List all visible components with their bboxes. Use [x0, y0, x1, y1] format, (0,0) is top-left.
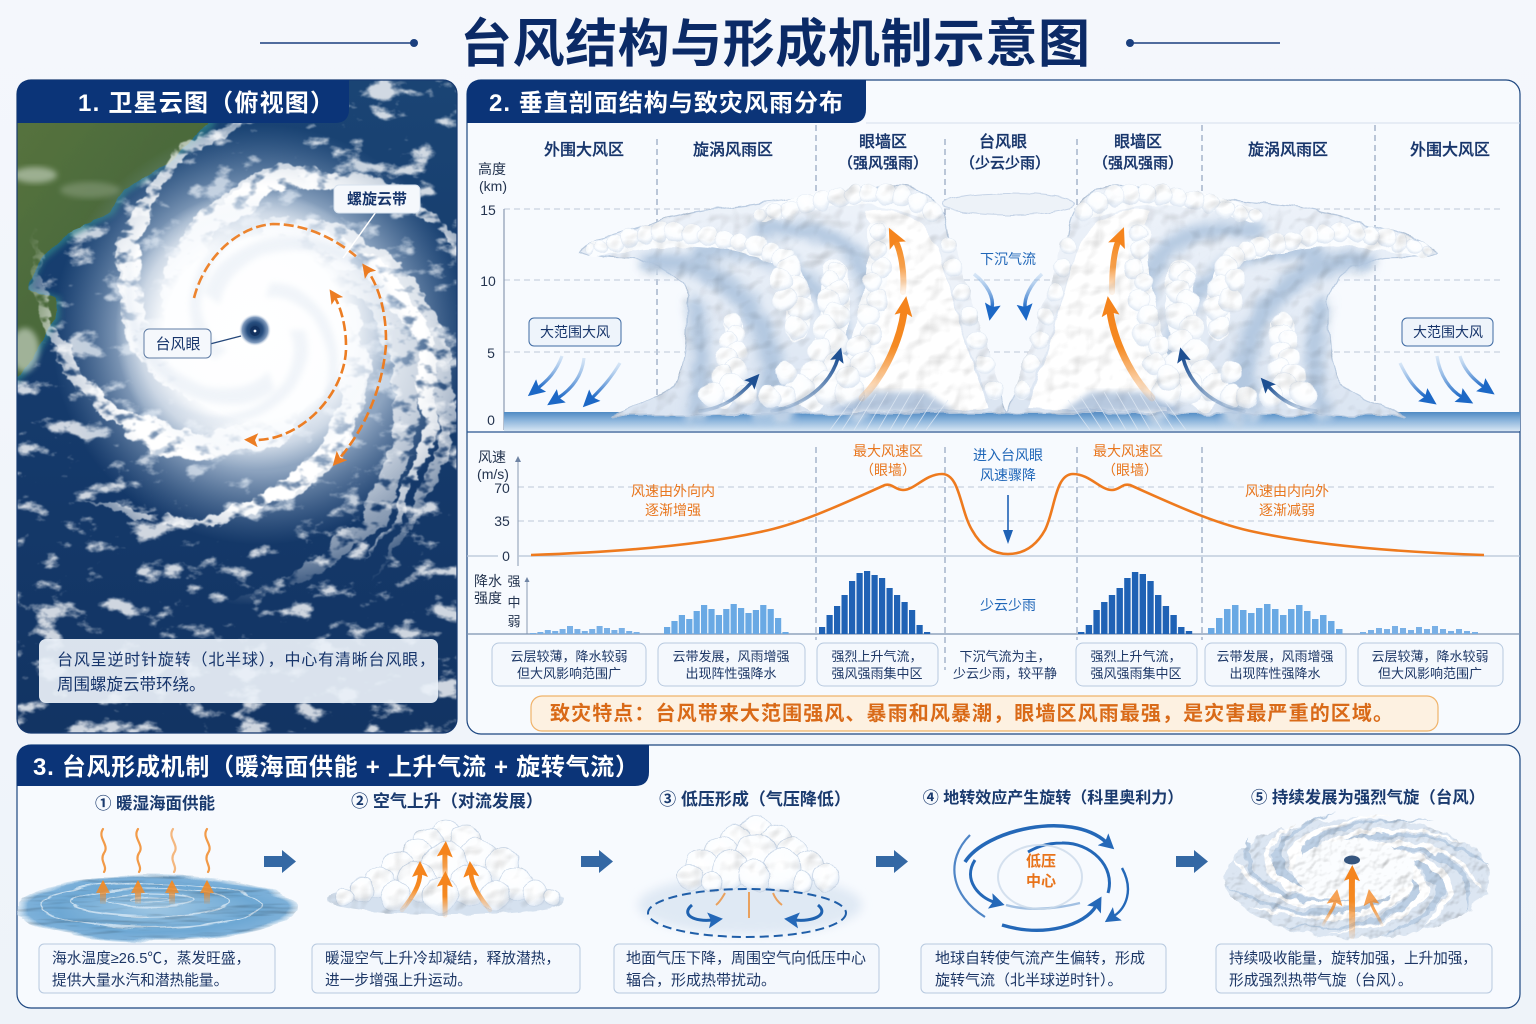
step 5 caption: 持续吸收能量，旋转加强，上升加强， — [1229, 950, 1477, 967]
zone caption boxes: 强风强雨集中区 — [831, 666, 923, 681]
eyewall clouds, left and right — [579, 184, 1437, 416]
cloud — [677, 816, 839, 892]
central ascent arrows — [1323, 878, 1382, 936]
zone caption boxes: 云带发展，风雨增强 — [672, 649, 790, 664]
step 4: Coriolis: ④ 地转效应产生旋转（科里奥利力） — [923, 788, 1183, 807]
hazy surface — [638, 875, 862, 935]
panel: satellite view — [16, 79, 458, 734]
height axis: 10 — [480, 273, 496, 289]
wind arrows right — [1400, 356, 1484, 397]
typhoon disk — [1213, 804, 1503, 944]
low-pressure ring — [648, 889, 846, 937]
wind annotations: （眼墙） — [860, 462, 916, 478]
header: panel 1: 1. 卫星云图（俯视图） — [78, 90, 334, 117]
zone labels: 旋涡风雨区 — [1248, 141, 1328, 159]
panel: formation mechanism — [16, 745, 1520, 1008]
zone caption boxes: 云层较薄，降水较弱 — [1371, 649, 1489, 664]
rotating flow arrows — [954, 826, 1128, 930]
header: panel 1 — [17, 80, 349, 123]
zone labels: 外围大风区 — [1410, 141, 1490, 159]
satellite caption: 台风呈逆时针旋转（北半球），中心有清晰台风眼， — [57, 651, 435, 669]
zone labels — [544, 132, 1490, 172]
header: panel 3: 3. 台风形成机制（暖海面供能 + 上升气流 + 旋转气流） — [33, 753, 639, 781]
zone caption boxes: 出现阵性强降水 — [1229, 666, 1321, 681]
step 1 caption: 提供大量水汽和潜热能量。 — [52, 972, 228, 989]
step 4 caption: 地球自转使气流产生偏转，形成 — [935, 950, 1145, 967]
wind speed curve — [531, 474, 1484, 555]
low-pressure centre label — [1026, 852, 1056, 890]
eyewall rainfall bars — [819, 571, 1192, 634]
disaster banner: 致灾特点：台风带来大范围强风、暴雨和风暴潮，眼墙区风雨最强，是灾害最严重的区域。 — [550, 701, 1393, 725]
wind annotations: 风速骤降 — [980, 467, 1036, 483]
wind speed chart: 70 — [494, 480, 510, 496]
label: spiral band — [334, 185, 420, 258]
label: typhoon eye — [144, 329, 241, 358]
zone caption boxes: 云层较薄，降水较弱 — [510, 649, 628, 664]
arrow: step 4 to 5 — [1176, 850, 1208, 873]
chart zone separators — [816, 447, 1202, 670]
panel outline — [17, 80, 457, 733]
step 2 caption: 暖湿空气上升冷却凝结，释放潜热， — [325, 950, 560, 967]
updraft arrows — [402, 854, 490, 915]
step 5 caption: 形成强烈热带气旋（台风）。 — [1229, 972, 1413, 989]
zone caption boxes: 强风强雨集中区 — [1090, 666, 1182, 681]
wind annotations: 风速由外向内 — [631, 483, 715, 499]
typhoon eye — [239, 314, 271, 346]
zone labels: （强风强雨） — [1093, 155, 1183, 172]
arrow: step 2 to 3 — [581, 850, 613, 873]
precipitation chart: 强 — [507, 574, 521, 589]
title: 台风结构与形成机制示意图 — [460, 16, 1090, 74]
step 3 caption: 地面气压下降，周围空气向低压中心 — [626, 950, 866, 967]
zone labels: 旋涡风雨区 — [693, 141, 773, 159]
sea disk — [16, 875, 296, 941]
disaster banner — [531, 696, 1438, 731]
downdraft label and arrows — [974, 251, 1042, 308]
zone caption boxes: 出现阵性强降水 — [685, 666, 777, 681]
label: spiral band: 螺旋云带 — [347, 190, 407, 208]
wind annotations: 逐渐减弱 — [1259, 502, 1315, 518]
step 5 caption — [1216, 944, 1492, 993]
header: panel 2 — [467, 80, 866, 123]
cloud haze beneath arms — [52, 125, 472, 545]
arrow: step 1 to 2 — [264, 850, 296, 873]
step 3 caption: 辐合，形成热带扰动。 — [626, 972, 776, 989]
precipitation chart: 中 — [507, 595, 521, 610]
small eye — [1344, 856, 1360, 864]
wind speed chart: 风速 — [478, 449, 506, 465]
zone caption boxes: 少云少雨，较平静 — [953, 666, 1057, 681]
step 4 caption: 旋转气流（北半球逆时针）。 — [935, 972, 1123, 989]
zone labels: （少云少雨） — [960, 155, 1050, 172]
wind annotations — [631, 443, 1329, 544]
zone labels: （强风强雨） — [838, 155, 928, 172]
label: wide-range wind right — [1402, 318, 1493, 346]
step 5: mature typhoon: ⑤ 持续发展为强烈气旋（台风） — [1251, 788, 1485, 807]
wind speed chart: (m/s) — [477, 466, 509, 482]
label: wide-range wind left — [529, 318, 621, 346]
mid rainfall bars — [664, 604, 1342, 634]
header: panel 2: 2. 垂直剖面结构与致灾风雨分布 — [489, 90, 843, 117]
step 1: warm ocean — [16, 794, 296, 993]
zone caption boxes: 下沉气流为主， — [959, 649, 1051, 664]
downdraft label and arrows: 下沉气流 — [980, 251, 1036, 267]
wind arrows left — [538, 356, 620, 398]
step 2 caption — [312, 944, 580, 993]
eye top thin cloud — [942, 193, 1074, 215]
zone caption boxes: 但大风影响范围广 — [1378, 666, 1482, 681]
zone labels: 外围大风区 — [544, 141, 624, 159]
height axis: 15 — [480, 202, 496, 218]
height axis — [478, 161, 507, 430]
wind annotations: 进入台风眼 — [973, 447, 1043, 463]
heat waves — [101, 829, 210, 872]
rising arrows — [96, 880, 214, 904]
precipitation chart: 强度 — [474, 590, 502, 606]
satellite caption — [39, 639, 438, 703]
wind annotations: （眼墙） — [1102, 462, 1158, 478]
label: wide-range wind left: 大范围大风 — [540, 324, 610, 340]
step 2: rising air: ② 空气上升（对流发展） — [351, 791, 543, 811]
precipitation chart — [467, 571, 1520, 634]
sea surface — [504, 412, 1520, 431]
step 2 caption: 进一步增强上升运动。 — [325, 972, 472, 989]
ocean background — [17, 80, 457, 733]
step 3: low pressure: ③ 低压形成（气压降低） — [659, 789, 851, 809]
low-pressure centre label: 低压 — [1026, 852, 1056, 870]
zone labels: 眼墙区 — [859, 133, 907, 151]
section divider — [467, 431, 1520, 433]
zone caption boxes: 但大风影响范围广 — [517, 666, 621, 681]
height axis: 高度 — [478, 161, 506, 177]
zone caption boxes — [492, 643, 1503, 686]
wind annotations: 逐渐增强 — [645, 502, 701, 518]
height axis: 0 — [487, 412, 495, 428]
land mass — [10, 118, 215, 385]
low-pressure centre label: 中心 — [1026, 873, 1056, 890]
step 4: Coriolis — [921, 788, 1183, 993]
step 4 caption — [921, 944, 1166, 993]
updraft arrows: left — [700, 242, 904, 411]
zone labels: 台风眼 — [979, 132, 1027, 151]
outer rainfall bars — [530, 626, 1478, 634]
precipitation chart: 弱 — [507, 614, 521, 629]
title — [260, 16, 1280, 74]
wind annotations: 最大风速区 — [853, 443, 923, 459]
panel: vertical cross-section — [467, 80, 1520, 734]
label: wide-range wind right: 大范围大风 — [1413, 324, 1483, 340]
step 5: mature typhoon — [1213, 788, 1503, 993]
precipitation chart: 少云少雨 — [980, 597, 1036, 613]
arrow: step 3 to 4 — [876, 850, 908, 873]
disc texture — [126, 236, 400, 420]
wind annotations: 风速由内向外 — [1245, 483, 1329, 499]
wind speed chart — [467, 443, 1520, 566]
updraft arrows: right — [1110, 242, 1316, 411]
zone caption boxes: 强烈上升气流， — [831, 649, 923, 664]
height gridlines — [504, 209, 1503, 352]
eyewall bright disc — [115, 190, 395, 470]
satellite caption: 周围螺旋云带环绕。 — [57, 675, 206, 694]
step 3 caption — [614, 944, 879, 993]
inflow arrows — [688, 892, 822, 920]
zone separators — [657, 125, 1375, 410]
wind annotations: 最大风速区 — [1093, 443, 1163, 459]
orange rotation arrows — [194, 224, 386, 460]
zone caption boxes: 强烈上升气流， — [1090, 649, 1182, 664]
label: typhoon eye: 台风眼 — [155, 336, 201, 353]
step 1: warm ocean: ① 暖湿海面供能 — [95, 794, 216, 813]
precipitation chart: 降水 — [474, 573, 502, 589]
step 2: rising air — [312, 791, 580, 993]
wind speed chart: 35 — [494, 513, 510, 529]
header: panel 3 — [17, 745, 649, 786]
step 1 caption: 海水温度≥26.5℃，蒸发旺盛， — [52, 950, 250, 967]
wind speed chart: 0 — [502, 548, 510, 564]
height axis: (km) — [479, 178, 507, 194]
step 1 caption — [39, 944, 275, 993]
convective cloud — [327, 820, 563, 915]
scattered cloud field — [17, 80, 457, 733]
eyewall rain, left and right — [830, 392, 1186, 430]
spiral cloud arms — [28, 123, 456, 602]
step 3: low pressure — [614, 789, 879, 993]
zone caption boxes: 云带发展，风雨增强 — [1216, 649, 1334, 664]
height axis: 5 — [487, 345, 495, 361]
zone labels: 眼墙区 — [1114, 133, 1162, 151]
